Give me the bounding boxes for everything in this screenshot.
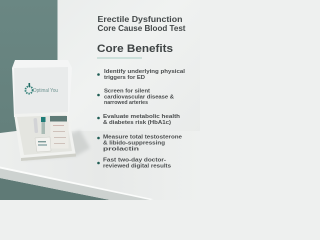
- heading: product name: Erectile Dysfunction: [98, 15, 183, 24]
- sample card: [35, 137, 51, 152]
- benefit 2: cardiovascular disease &: [104, 94, 174, 100]
- heading: product name: Core Cause Blood Test: [98, 24, 186, 33]
- white wall background: [0, 0, 200, 200]
- benefit 2: narrowed arteries: [104, 100, 148, 106]
- benefit 2: [97, 88, 174, 106]
- marble counter top: [0, 131, 200, 200]
- teal wall panel: [0, 0, 58, 135]
- benefit 4: prolactin: [103, 146, 140, 152]
- benefit 4: & libido-suppressing: [103, 140, 166, 146]
- counter highlight: [0, 166, 155, 200]
- open test kit box: [12, 60, 76, 161]
- box shadow: [22, 130, 90, 160]
- benefit 1: [97, 69, 185, 81]
- instruction leaflet: [50, 116, 67, 122]
- sample tube: [41, 117, 46, 122]
- benefit 5: [97, 158, 171, 170]
- benefit 3: Evaluate metabolic health: [103, 114, 181, 120]
- heading: product name: [98, 15, 186, 33]
- benefit 4: [97, 134, 182, 152]
- teal floor below counter: [0, 178, 110, 200]
- benefit 3: & diabetes risk (HbA1c): [103, 120, 171, 126]
- benefit 5: reviewed digital results: [103, 164, 171, 170]
- box base: [14, 112, 76, 161]
- benefit 3: [97, 114, 181, 126]
- benefit 4: Measure total testosterone: [103, 134, 182, 140]
- benefit 1: Identify underlying physical: [104, 69, 185, 75]
- brand logo on lid: Optimal You: [33, 88, 58, 94]
- benefit 5: Fast two-day doctor-: [103, 158, 166, 164]
- heading: core benefits: Core Benefits: [97, 43, 173, 55]
- teal divider: [97, 58, 142, 59]
- blood collection device: [33, 118, 38, 133]
- counter front edge: [0, 167, 155, 200]
- benefit 1: triggers for ED: [104, 75, 145, 81]
- benefit 2: Screen for silent: [104, 88, 150, 94]
- product scene and text: [0, 0, 186, 200]
